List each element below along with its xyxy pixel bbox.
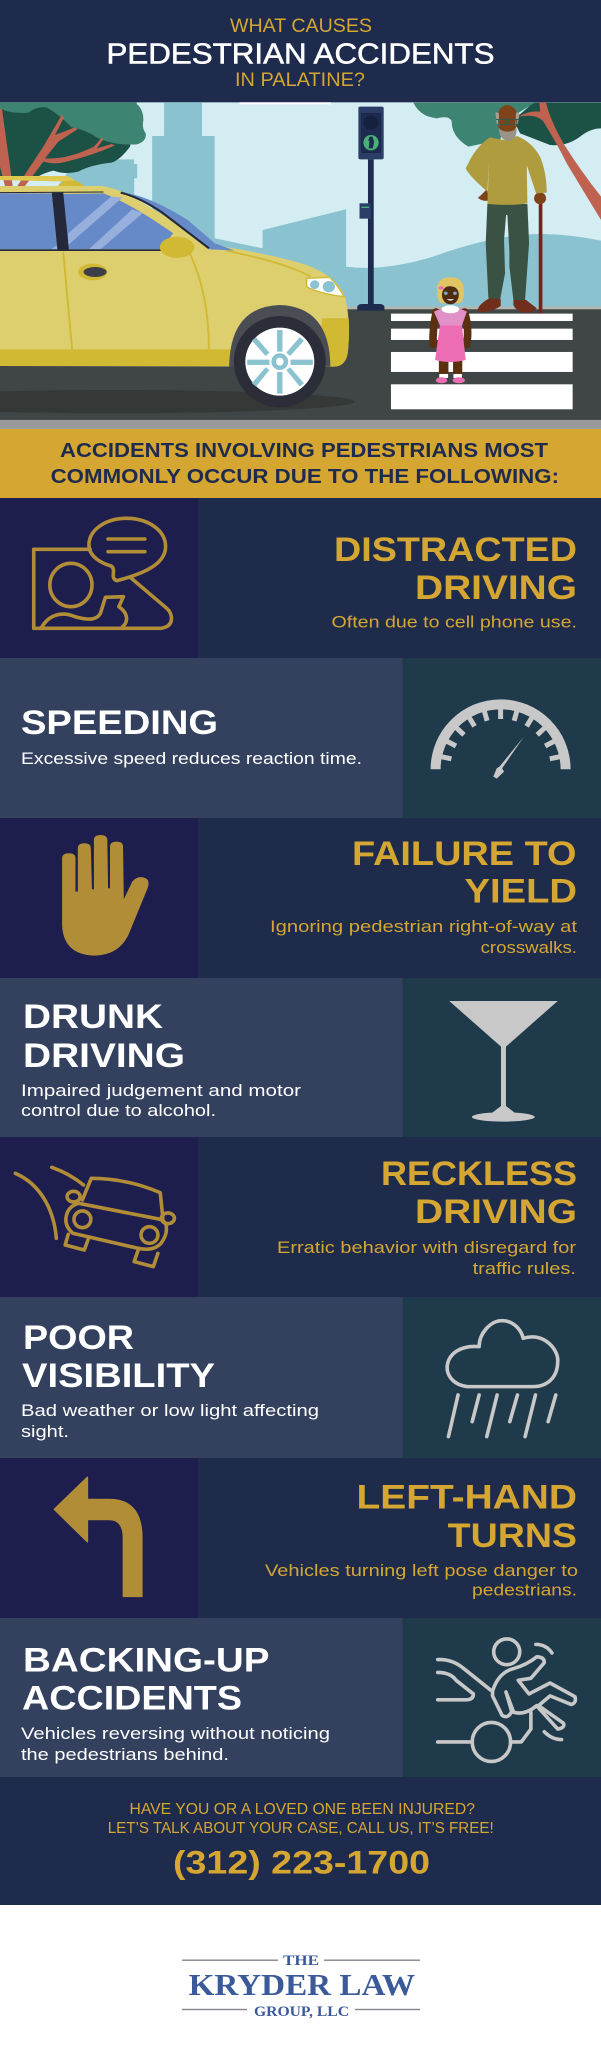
heading: BACKING-UP bbox=[23, 1642, 270, 1680]
banner: intro heading: ACCIDENTS INVOLVING PEDESTRIANS MOST bbox=[60, 440, 548, 462]
icon: pedestrian hit by car bbox=[438, 1639, 575, 1761]
road bbox=[0, 309, 601, 420]
panel: call to action bbox=[0, 1777, 601, 1905]
man with cane bbox=[466, 105, 547, 313]
description: Ignoring pedestrian right-of-way at bbox=[270, 918, 578, 936]
wheel bbox=[229, 305, 330, 407]
description line 2: sight. bbox=[21, 1423, 69, 1441]
heading: POOR bbox=[23, 1319, 134, 1357]
heading: DRUNK bbox=[23, 998, 163, 1036]
heading: RECKLESS bbox=[381, 1155, 577, 1193]
title: PEDESTRIAN ACCIDENTS bbox=[106, 38, 494, 70]
description: Bad weather or low light affecting bbox=[21, 1402, 319, 1420]
icon: martini glass bbox=[449, 1001, 558, 1122]
title line: what causes: WHAT CAUSES bbox=[230, 15, 372, 37]
car shadow bbox=[0, 390, 355, 413]
logo: the kryder law group: KRYDER LAW bbox=[189, 1967, 415, 2002]
girl bbox=[433, 277, 468, 383]
heading line 2: DRIVING bbox=[23, 1037, 185, 1075]
heading line 2: DRIVING bbox=[415, 569, 577, 607]
description: Vehicles turning left pose danger to bbox=[265, 1562, 578, 1580]
panel: distracted driving bbox=[0, 498, 601, 658]
phone number: (312) 223-1700 bbox=[173, 1844, 430, 1880]
title line: in palatine: IN PALATINE? bbox=[235, 69, 365, 91]
heading: LEFT-HAND bbox=[356, 1478, 577, 1516]
call to action line 2: LET’S TALK ABOUT YOUR CASE, CALL US, IT’S FREE! bbox=[108, 1820, 494, 1837]
heading line 2: TURNS bbox=[448, 1517, 577, 1555]
logo: the kryder law group: GROUP, LLC bbox=[254, 2004, 349, 2020]
description: Excessive speed reduces reaction time. bbox=[21, 750, 362, 768]
curb bbox=[345, 307, 601, 310]
heading line 2: DRIVING bbox=[415, 1193, 577, 1231]
panel: backing-up accidents bbox=[0, 1618, 601, 1777]
panel: reckless driving bbox=[0, 1137, 601, 1297]
logo: the kryder law group bbox=[182, 1953, 420, 2020]
description: Often due to cell phone use. bbox=[332, 614, 577, 632]
icon: raised hand bbox=[62, 835, 149, 956]
icon: swerving car bbox=[15, 1167, 174, 1267]
heading line 2: ACCIDENTS bbox=[22, 1680, 242, 1718]
description line 2: traffic rules. bbox=[473, 1260, 576, 1278]
banner: intro heading bbox=[0, 429, 601, 498]
illustration: street scene bbox=[0, 102, 601, 429]
panel: left-hand turns bbox=[0, 1458, 601, 1618]
traffic light bbox=[357, 107, 384, 311]
banner: intro heading: COMMONLY OCCUR DUE TO THE FOLLOWING: bbox=[51, 466, 559, 488]
description: Erratic behavior with disregard for bbox=[277, 1239, 577, 1257]
panel: failure to yield bbox=[0, 818, 601, 978]
crosswalk bbox=[391, 314, 573, 409]
description: Impaired judgement and motor bbox=[21, 1082, 302, 1100]
car bbox=[0, 176, 349, 407]
panel: header bbox=[0, 0, 601, 103]
panel: speeding bbox=[0, 658, 601, 818]
heading line 2: YIELD bbox=[464, 873, 577, 911]
icon: left turn arrow bbox=[54, 1477, 142, 1596]
heading line 2: VISIBILITY bbox=[22, 1357, 215, 1395]
tree: right bbox=[413, 103, 601, 220]
panel: poor visibility bbox=[0, 1297, 601, 1458]
description: Vehicles reversing without noticing bbox=[21, 1725, 330, 1743]
heading: SPEEDING bbox=[21, 704, 218, 742]
icon: speedometer bbox=[431, 699, 571, 779]
tree: left bbox=[0, 103, 146, 186]
heading: FAILURE TO bbox=[352, 835, 576, 873]
call to action line 1: HAVE YOU OR A LOVED ONE BEEN INJURED? bbox=[130, 1801, 475, 1818]
logo: the kryder law group: THE bbox=[283, 1953, 319, 1969]
description line 2: control due to alcohol. bbox=[21, 1102, 216, 1120]
city skyline bbox=[57, 102, 601, 310]
description line 2: pedestrians. bbox=[472, 1582, 577, 1600]
heading: DISTRACTED bbox=[334, 531, 577, 569]
icon: rain cloud bbox=[447, 1321, 558, 1437]
description line 2: crosswalks. bbox=[481, 939, 577, 957]
panel: drunk driving bbox=[0, 978, 601, 1137]
icon: driver on phone bbox=[34, 518, 171, 628]
description line 2: the pedestrians behind. bbox=[21, 1746, 229, 1764]
